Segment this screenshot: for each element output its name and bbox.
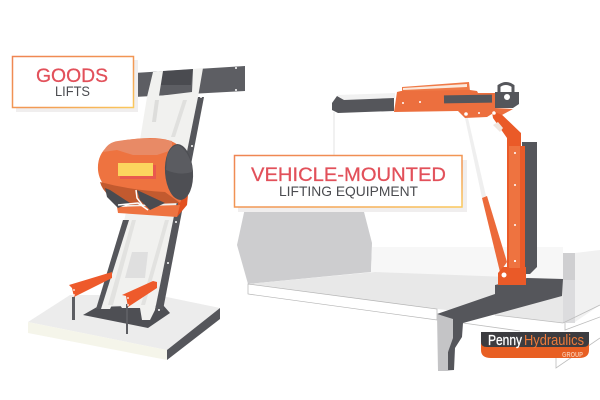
mast backing [522,142,537,274]
vehicle-mounted label [234,156,467,212]
left safety barrier [69,272,112,320]
goods lifts label [12,56,138,112]
heading: VEHICLE-MOUNTED [251,164,446,186]
right side box [563,250,600,323]
chassis post [437,314,454,371]
lift carriage [98,138,195,217]
shackle [495,84,519,115]
hanging cable [333,112,335,156]
flatbed edge [248,284,437,320]
concrete base [28,295,220,360]
boom [332,82,496,118]
hydraulic rod [465,118,486,198]
Penny Hydraulics logo [481,332,589,359]
heading: GOODS [36,65,108,87]
vehicle truck bed [237,208,600,371]
logo wordmark: Penny [488,333,523,349]
rear panel [371,247,563,280]
cab silhouette [237,208,372,284]
lift column [96,68,204,320]
base plate [83,305,170,328]
logo orange base [481,343,589,358]
Penny Hydraulics logo: Hydraulics [524,333,584,349]
right safety barrier [122,281,157,334]
knuckle arm [492,110,521,146]
mast [507,145,525,285]
goods lift illustration [28,66,245,360]
subheading: LIFTING EQUIPMENT [279,183,418,199]
logo dark plate [481,332,589,347]
mast foot [498,260,526,285]
top beam [134,66,245,97]
crane illustration [332,82,537,285]
hydraulic cylinder [482,196,507,272]
chassis beam [437,278,563,370]
lower side rail [463,305,600,368]
subheading: LIFTS [55,84,90,99]
flatbed surface [248,272,563,323]
logo group text: GROUP [562,352,583,359]
